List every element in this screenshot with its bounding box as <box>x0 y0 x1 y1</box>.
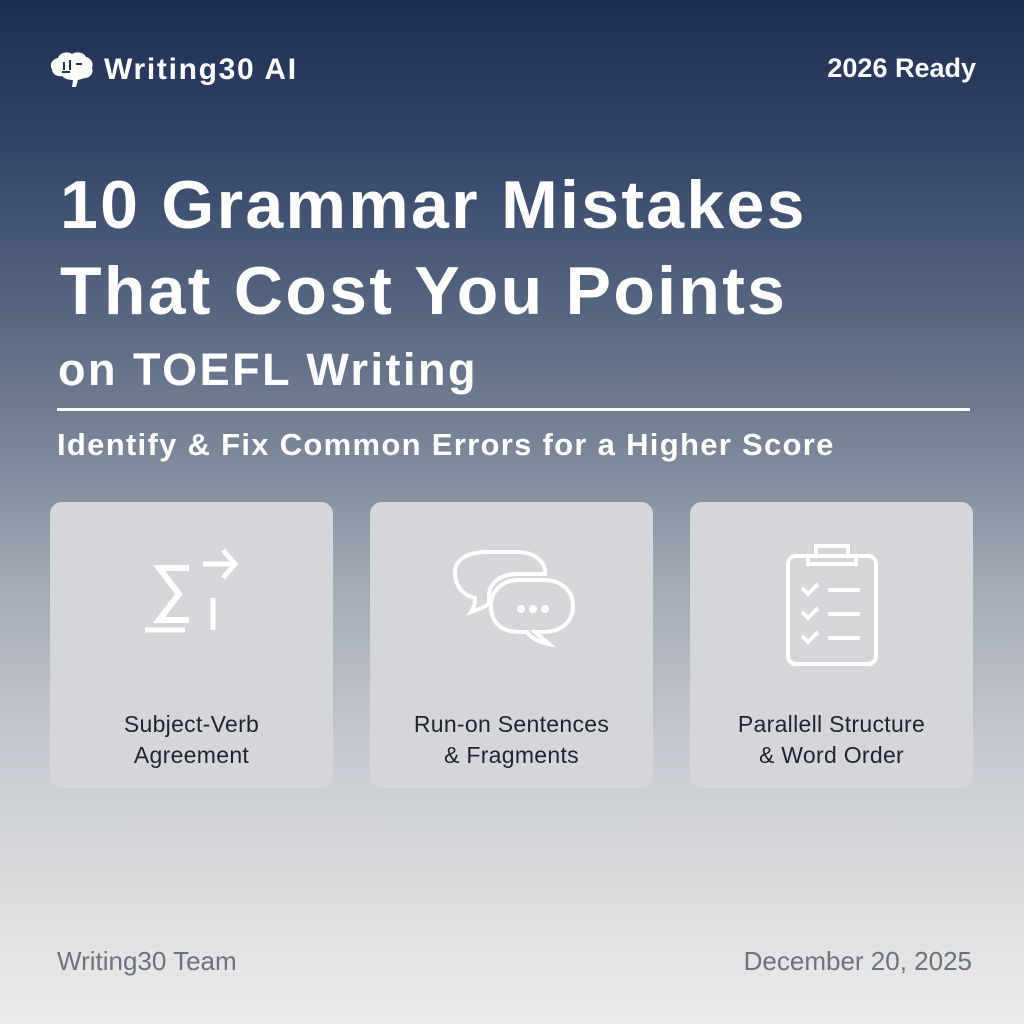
title: 10 Grammar Mistakes <box>60 167 807 243</box>
icon: brain <box>50 52 93 87</box>
card: subject-verb agreement <box>50 502 333 788</box>
title: That Cost You Points <box>60 253 787 329</box>
card: parallel structure <box>690 502 973 788</box>
card: parallel structure: & Word Order <box>759 742 904 768</box>
card: run-on sentences <box>370 502 653 788</box>
icon: chat bubbles <box>453 550 575 648</box>
title <box>60 167 807 329</box>
icon: sigma arrow <box>145 548 238 632</box>
card: run-on sentences: & Fragments <box>444 742 579 768</box>
icon: clipboard checklist <box>786 544 878 666</box>
card: parallel structure: Parallell Structure <box>738 711 925 737</box>
footer: author: Writing30 Team <box>57 946 237 976</box>
card: run-on sentences: Run-on Sentences <box>414 711 609 737</box>
badge: 2026 Ready: 2026 Ready <box>827 53 976 83</box>
card: subject-verb agreement: Subject-Verb <box>124 711 259 737</box>
subtitle line: on TOEFL Writing: on TOEFL Writing <box>58 344 478 395</box>
footer: date: December 20, 2025 <box>744 946 972 976</box>
card: subject-verb agreement: Agreement <box>134 742 249 768</box>
tagline: Identify & Fix Common Errors for a Higher Score <box>57 427 835 462</box>
logo: Writing30 AI <box>104 53 298 86</box>
